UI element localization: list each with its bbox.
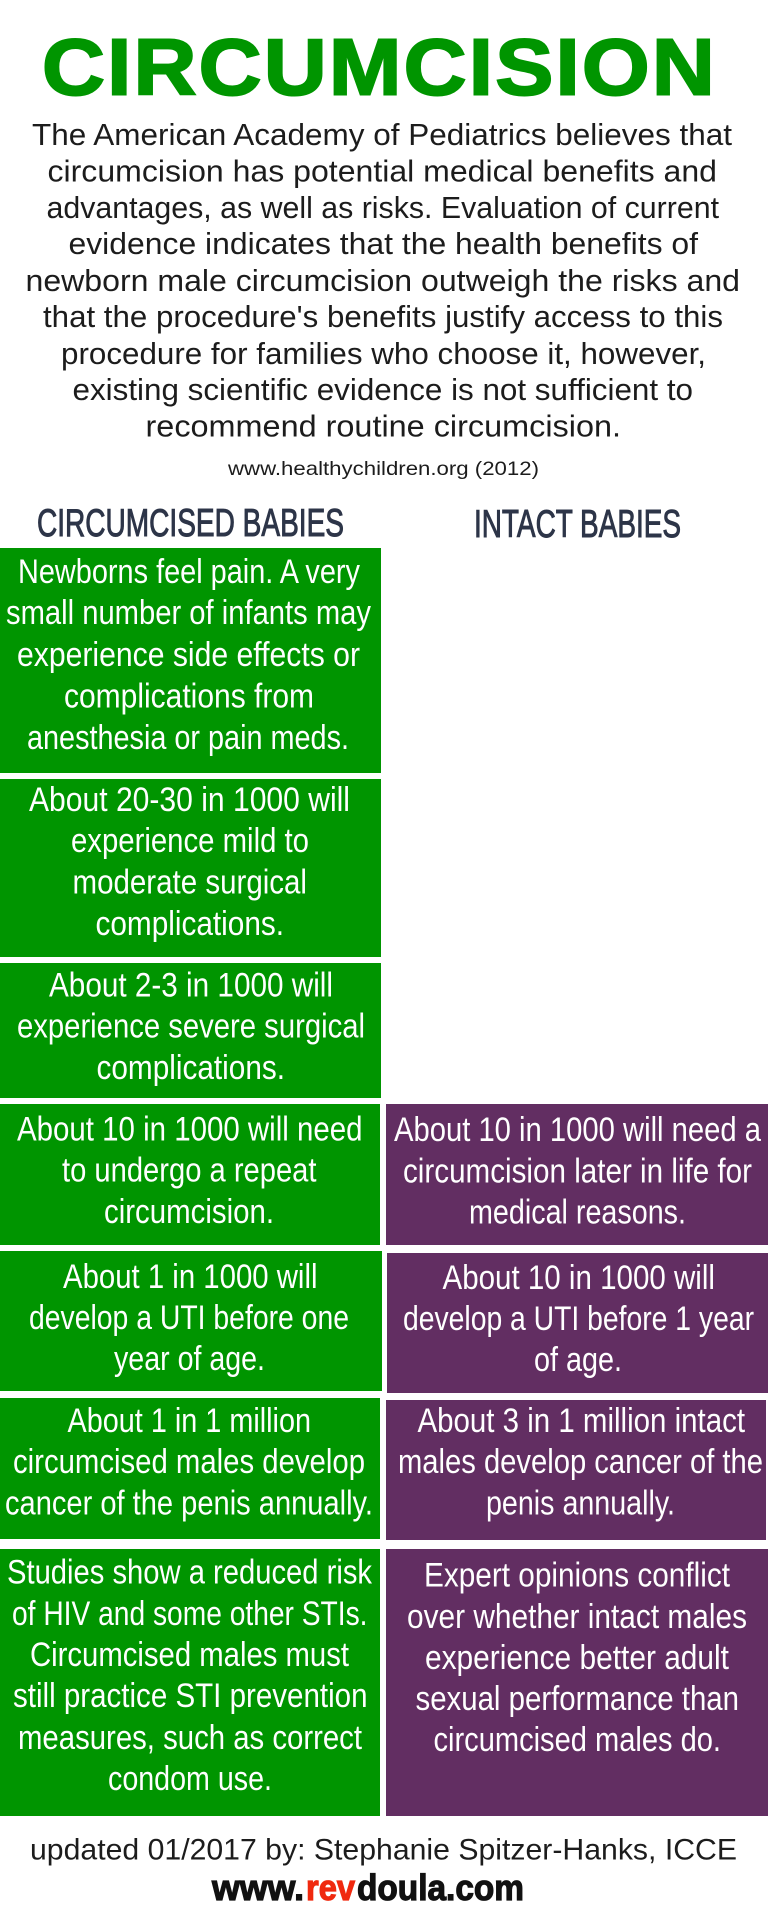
panel: severe surgical complications: complications.	[96, 1049, 285, 1087]
panel: later circumcision, intact	[386, 1104, 768, 1245]
intro paragraph: procedure for families who choose it, however,	[61, 336, 706, 371]
intro paragraph: existing scientific evidence is not sufficient to	[72, 372, 693, 407]
panel: sexual performance opinions: circumcised males do.	[434, 1721, 721, 1759]
panel: sexual performance opinions: Expert opinions conflict	[424, 1556, 730, 1594]
intro paragraph	[26, 117, 740, 444]
footer website: doula.com	[357, 1867, 524, 1908]
intro paragraph: advantages, as well as risks. Evaluation of current	[46, 190, 719, 225]
panel: repeat circumcision: to undergo a repeat	[62, 1152, 317, 1190]
panel: repeat circumcision	[0, 1104, 380, 1245]
panel: later circumcision, intact: medical reasons.	[469, 1194, 686, 1232]
intro paragraph: that the procedure's benefits justify access to this	[43, 299, 723, 334]
panel: sexual performance opinions: experience better adult	[425, 1639, 729, 1677]
column heading: intact babies: INTACT BABIES	[474, 503, 681, 546]
panel: penile cancer, circumcised: cancer of the penis annually.	[5, 1484, 373, 1522]
panel: mild surgical complications	[0, 779, 381, 957]
panel: repeat circumcision: About 10 in 1000 will need	[17, 1110, 362, 1148]
panel: penile cancer, circumcised: circumcised males develop	[13, 1443, 365, 1481]
panel: UTI risk, intact: About 10 in 1000 will	[442, 1259, 715, 1297]
intro paragraph: recommend routine circumcision.	[146, 408, 621, 444]
panel: severe surgical complications	[0, 963, 381, 1098]
panel: penile cancer, circumcised	[0, 1398, 380, 1539]
panel: severe surgical complications: About 2-3 in 1000 will	[49, 966, 333, 1004]
panel: HIV and STI risk: Studies show a reduced risk	[7, 1554, 373, 1592]
panel: pain and anesthesia	[0, 548, 381, 773]
panel: HIV and STI risk: Circumcised males must	[30, 1636, 349, 1674]
footer website: www.	[211, 1867, 304, 1908]
panel: HIV and STI risk: measures, such as correct	[18, 1719, 362, 1757]
panel: penile cancer, intact	[386, 1400, 766, 1540]
panel: pain and anesthesia: experience side effects or	[17, 636, 360, 674]
footer website: rev	[306, 1867, 355, 1908]
panel: severe surgical complications: experience severe surgical	[17, 1008, 365, 1046]
intro paragraph: newborn male circumcision outweigh the risks and	[26, 263, 740, 298]
panel: HIV and STI risk	[0, 1549, 380, 1816]
panel: pain and anesthesia: small number of infants may	[6, 594, 371, 632]
panel: penile cancer, circumcised: About 1 in 1 million	[68, 1402, 311, 1440]
panel: mild surgical complications: experience mild to	[71, 822, 309, 860]
panel: mild surgical complications: moderate surgical	[72, 864, 307, 902]
footer website	[211, 1867, 524, 1908]
title: CIRCUMCISION	[42, 22, 717, 112]
panel: pain and anesthesia: Newborns feel pain. A very	[18, 553, 360, 591]
column heading: circumcised babies: CIRCUMCISED BABIES	[37, 502, 344, 545]
source citation: www.healthychildren.org (2012)	[227, 458, 539, 480]
intro paragraph: The American Academy of Pediatrics believes that	[32, 117, 732, 152]
panel: UTI risk, circumcised	[0, 1251, 382, 1391]
panel: UTI risk, circumcised: year of age.	[114, 1340, 265, 1378]
panel: pain and anesthesia: complications from	[64, 678, 314, 716]
intro paragraph: evidence indicates that the health benefits of	[68, 226, 698, 261]
panel: UTI risk, intact: of age.	[534, 1341, 622, 1379]
panel: pain and anesthesia: anesthesia or pain meds.	[27, 719, 349, 757]
panel: HIV and STI risk: condom use.	[108, 1760, 272, 1798]
panel: HIV and STI risk: of HIV and some other STIs.	[12, 1595, 368, 1633]
panel: penile cancer, intact: penis annually.	[486, 1484, 675, 1522]
panel: HIV and STI risk: still practice STI prevention	[13, 1677, 368, 1715]
panel: UTI risk, intact	[387, 1253, 768, 1393]
panel: UTI risk, circumcised: develop a UTI before one	[29, 1299, 349, 1337]
panel: sexual performance opinions	[386, 1549, 768, 1816]
panel: repeat circumcision: circumcision.	[104, 1193, 274, 1231]
footer credit: updated 01/2017 by: Stephanie Spitzer-Hanks, ICCE	[30, 1834, 737, 1866]
panel: mild surgical complications: complications.	[96, 905, 284, 943]
panel: mild surgical complications: About 20-30 in 1000 will	[29, 781, 350, 819]
panel: UTI risk, circumcised: About 1 in 1000 will	[63, 1258, 318, 1296]
intro paragraph: circumcision has potential medical benefits and	[48, 154, 717, 188]
